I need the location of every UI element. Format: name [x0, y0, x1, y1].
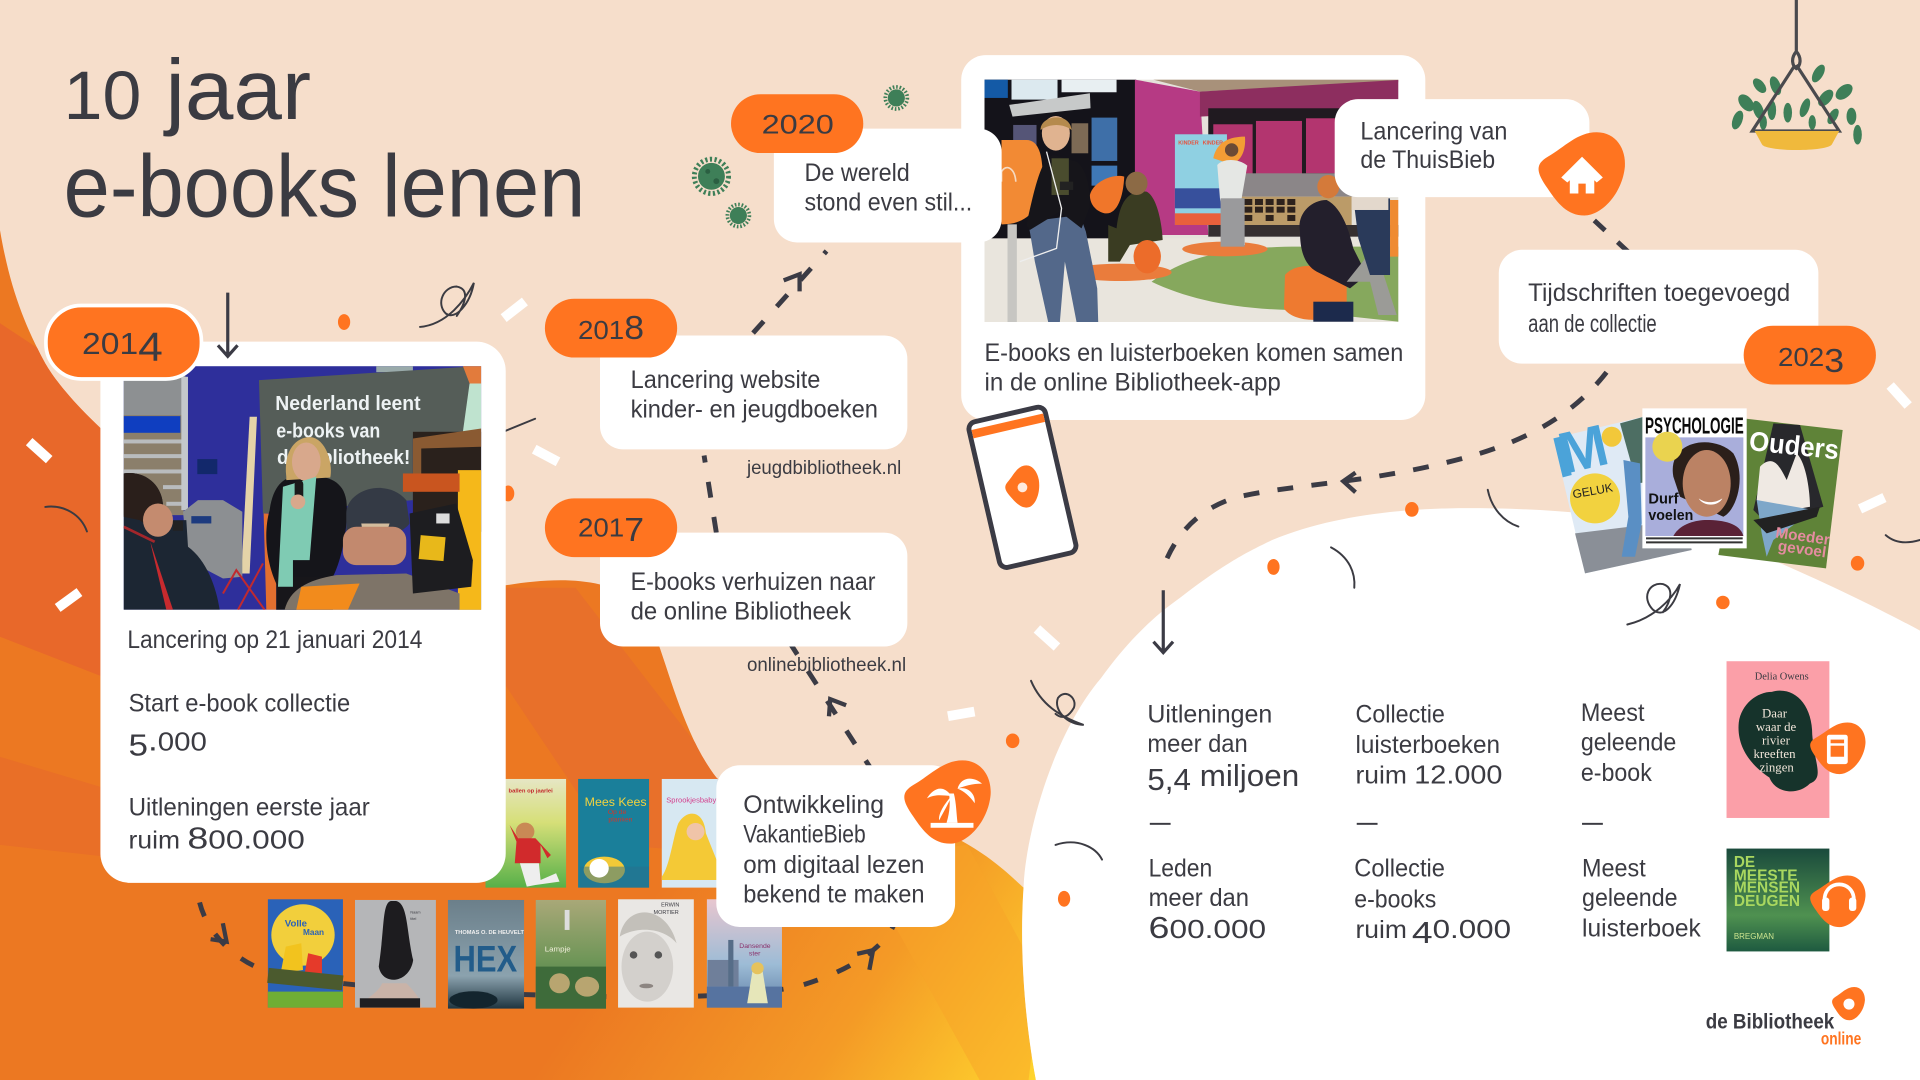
- number: 5.000: 000: [158, 729, 207, 757]
- panel: 2018 website: [545, 299, 907, 449]
- text: 2018: kinder- en jeugdboeken: [631, 396, 878, 424]
- book cover: Lampje: Lampje: [545, 944, 571, 953]
- book cover: Mees Kees: planken: [608, 816, 633, 823]
- badge: 2020: 2020: [762, 109, 834, 139]
- statistic: audiobook collection: Collectie: [1356, 700, 1445, 728]
- panel: magazines added: [1499, 250, 1876, 384]
- photo: launch event: [124, 366, 482, 610]
- text: app merge: in de online Bibliotheek-app: [984, 369, 1281, 397]
- statistic: most borrowed audiobook: [1582, 855, 1701, 943]
- white shape: [1022, 508, 1920, 1080]
- book cover: Lampje: [536, 900, 606, 1009]
- magazine: Margriet: M: [1552, 412, 1614, 487]
- book cover: HEX: HEX: [453, 939, 517, 980]
- book cover: black ponytail: titel: [410, 917, 416, 921]
- book cover: De meeste mensen deugen: [1727, 849, 1829, 951]
- statistic: most borrowed audiobook: geleende: [1582, 884, 1678, 912]
- statistic: most borrowed e-book: [1581, 699, 1676, 787]
- statistic: audiobook collection: ruim: [1356, 762, 1407, 790]
- panel: app: [961, 55, 1425, 420]
- statistic: e-book collection: 0.000: [1433, 916, 1511, 944]
- book cover: Mees Kees: Op de: [608, 809, 627, 816]
- statistic: members: [1149, 855, 1266, 945]
- statistic: e-book collection: e-books: [1354, 885, 1436, 913]
- book cover: De meeste mensen deugen: DE: [1734, 854, 1755, 871]
- number: 5.000: 5: [129, 729, 148, 763]
- magazine: Psychologie: voelen: [1648, 508, 1693, 524]
- book cover: Volle Maan: Volle: [285, 919, 307, 930]
- number: ruim 800.000: ruim: [129, 827, 180, 855]
- icon: virus top: [885, 87, 907, 109]
- dashed timeline path: [200, 220, 1629, 997]
- photo: launch event: de bibliotheek!: [277, 447, 410, 469]
- logo: de Bibliotheek online: [1706, 987, 1865, 1048]
- book cover: De meeste mensen deugen: DEUGEN: [1734, 893, 1800, 910]
- photo: library listening area: KINDER: [1178, 140, 1199, 146]
- title: [64, 42, 585, 236]
- text: 2017: [631, 568, 876, 626]
- statistic: loans: meer dan: [1147, 730, 1248, 758]
- panel: 2017 move: [545, 498, 907, 647]
- book cover: De meeste mensen deugen: MEESTE: [1734, 867, 1798, 884]
- book cover: De meeste mensen deugen: BREGMAN: [1734, 932, 1774, 941]
- text: start collection: Start e-book collectie: [129, 689, 350, 717]
- statistic: members: meer dan: [1149, 884, 1249, 912]
- books row: bottom: [267, 899, 782, 1009]
- text: magazines: [1528, 279, 1790, 338]
- text: ThuisBieb: [1360, 118, 1507, 174]
- book cover: Daar waar de rivierkreeften zingen: [1727, 661, 1829, 818]
- book cover: Sprookjesbaby: Sprookjesbaby: [666, 796, 717, 805]
- statistic: e-book collection: ruim: [1356, 916, 1407, 944]
- orange gradient shape: [0, 230, 1036, 1080]
- icon: hanging plant: [1730, 0, 1862, 150]
- book cover: HEX: THOMAS O. DE HEUVELT: [455, 930, 525, 936]
- photo: library listening area: [984, 80, 1398, 322]
- badge: 2017: 201: [578, 514, 624, 542]
- panel: ThuisBieb: [1335, 99, 1625, 216]
- badge: 2023: 3: [1824, 343, 1844, 380]
- books row: top: [485, 779, 718, 888]
- logo: de Bibliotheek online: de Bibliotheek: [1706, 1011, 1835, 1034]
- book cover: black ponytail: Naam: [410, 910, 421, 914]
- magazine: Psychologie: [1642, 408, 1747, 548]
- book cover: ballen op jaarlei: [485, 779, 566, 888]
- statistic: audiobook collection: luisterboeken: [1356, 731, 1500, 759]
- arrow: start 2014: [218, 293, 238, 356]
- icon: virus bottom: [727, 204, 749, 227]
- number: 5.000: .: [148, 724, 158, 758]
- photo: launch event: e-books van: [276, 420, 380, 442]
- badge: 2014: 4: [138, 324, 163, 370]
- arrow: to vakantiebieb: [857, 950, 873, 970]
- icon: headphones: [1810, 876, 1866, 927]
- text: 2020: stond even stil...: [804, 189, 972, 217]
- text: 2018: [631, 366, 878, 424]
- book cover: Dansende ster: ster: [749, 950, 761, 957]
- statistic: most borrowed audiobook: luisterboek: [1582, 915, 1701, 943]
- statistic: e-book collection: 4: [1412, 916, 1433, 950]
- badge: 2017: [545, 498, 677, 557]
- text: app merge: E-books en luisterboeken komen samen: [984, 339, 1403, 367]
- badge: 2018: 2018: [578, 310, 644, 347]
- panel: 2020 world stood still: [731, 94, 1002, 242]
- magazine: Psychologie: Durf: [1648, 491, 1679, 507]
- book cover: ballen op jaarlei: ballen op jaarlei: [509, 789, 553, 795]
- link: jeugdbibliotheek.nl: jeugdbibliotheek.nl: [746, 458, 901, 479]
- statistic: most borrowed e-book: e-book: [1581, 759, 1652, 787]
- title: e-books lenen: [64, 137, 585, 236]
- magazine: Ouders: gevoel: [1777, 538, 1827, 561]
- text: launch date: Lancering op 21 januari 2014: [127, 626, 422, 654]
- text: 2020: [804, 159, 972, 217]
- book cover: Daar waar de rivierkreeften zingen: Delia Owens: [1755, 672, 1809, 683]
- text: VakantieBieb: [743, 791, 924, 908]
- photo: launch event: Nederland leent: [275, 393, 421, 415]
- text: magazines: Tijdschriften toegevoegd: [1528, 279, 1790, 307]
- icon: virus large: [694, 159, 729, 193]
- statistic: most borrowed audiobook: Meest: [1582, 855, 1646, 883]
- phone illustration: [967, 406, 1077, 569]
- link: onlinebibliotheek.nl: onlinebibliotheek.nl: [747, 655, 906, 676]
- badge: 2017: 7: [624, 512, 644, 549]
- badge: 2018: [545, 299, 677, 358]
- book cover: black ponytail: [355, 900, 436, 1008]
- confetti decorations: [26, 283, 1920, 907]
- badge: 2023: 202: [1778, 344, 1824, 372]
- text: magazines: aan de collectie: [1528, 310, 1657, 338]
- magazine: Ouders: Moeder: [1774, 524, 1831, 549]
- badge: 2020: [731, 94, 863, 153]
- icon: bibliotheek logo: [1001, 463, 1044, 511]
- arrow: magazines to statistics: [1343, 473, 1356, 492]
- panel: 2014 launch: [100, 342, 506, 883]
- number: ruim 800.000: [129, 822, 305, 856]
- icon: e-book: [1810, 722, 1866, 774]
- statistic: most borrowed e-book: Meest: [1581, 699, 1645, 727]
- text: first year loans: Uitleningen eerste jaar: [129, 794, 370, 822]
- magazines: [1552, 408, 1843, 573]
- text: app merge: [984, 339, 1403, 397]
- book cover: Mijn tweede huid: MORTIER: [654, 910, 679, 916]
- arrow: to 2017: [829, 699, 846, 716]
- text: VakantieBieb: bekend te maken: [743, 880, 924, 908]
- icon: house: [1539, 132, 1625, 216]
- badge: 2023: [1744, 326, 1876, 384]
- book cover: Volle Maan: [267, 899, 343, 1008]
- book cover: Volle Maan: Maan: [303, 928, 324, 937]
- statistic: loans: miljoen: [1191, 759, 1299, 793]
- book cover: Daar waar de rivierkreeften zingen: Daar: [1762, 707, 1788, 721]
- text: 2017: E-books verhuizen naar: [631, 568, 876, 596]
- panel: VakantieBieb: [716, 760, 991, 927]
- badge: 2014: [46, 306, 201, 379]
- statistic: audiobook collection: 12.000: [1414, 762, 1502, 790]
- arrow: to 2020: [784, 274, 800, 291]
- book cover: Mijn tweede huid: ERWIN: [661, 903, 679, 909]
- logo: de Bibliotheek online: online: [1821, 1028, 1861, 1048]
- arrow: to book row: [211, 923, 227, 942]
- magazine: Margriet: GELUK: [1571, 480, 1614, 501]
- book cover: Sprookjesbaby: [662, 779, 718, 888]
- book cover: De meeste mensen deugen: MENSEN: [1734, 880, 1800, 897]
- text: 2017: de online Bibliotheek: [631, 598, 851, 626]
- book cover: Dansende ster: [707, 899, 782, 1008]
- badge: 2014: 201: [82, 327, 138, 361]
- magazine: Ouders: [1718, 418, 1843, 568]
- icon: palm tree: [904, 760, 991, 844]
- arrow: down to statistics: [1153, 590, 1173, 653]
- statistic: audiobook collection: [1356, 700, 1502, 790]
- book cover: Mees Kees: [578, 779, 649, 888]
- statistic: loans: 5,4: [1147, 763, 1191, 797]
- book cover: Daar waar de rivierkreeften zingen: waar de: [1756, 720, 1797, 734]
- statistic: loans: Uitleningen: [1147, 700, 1272, 728]
- statistic: e-book collection: [1354, 855, 1511, 950]
- text: 2018: Lancering website: [631, 366, 820, 394]
- book cover: HEX: [448, 900, 525, 1009]
- title: 10 jaar: [64, 42, 311, 138]
- book cover: Daar waar de rivierkreeften zingen: zingen: [1760, 760, 1794, 774]
- statistic: members: Leden: [1149, 855, 1212, 883]
- statistic: e-book collection: Collectie: [1354, 855, 1445, 883]
- statistic: members: 600.000: [1149, 911, 1266, 945]
- number: ruim 800.000: 800.000: [187, 822, 305, 856]
- book cover: Mijn tweede huid: [618, 899, 694, 1008]
- book cover: Daar waar de rivierkreeften zingen: rivier: [1762, 733, 1791, 747]
- magazine: Margriet: [1552, 412, 1692, 573]
- text: ThuisBieb: de ThuisBieb: [1360, 146, 1495, 174]
- magazine: Ouders: Ouders: [1748, 425, 1840, 465]
- book cover: Dansende ster: Dansende: [739, 943, 771, 950]
- magazine: Psychologie: PSYCHOLOGIE: [1645, 412, 1744, 438]
- statistic: loans: [1147, 700, 1299, 797]
- text: 2020: De wereld: [804, 159, 910, 187]
- book cover: Daar waar de rivierkreeften zingen: kreeften: [1753, 747, 1796, 761]
- photo: library listening area: KINDER: [1203, 140, 1223, 146]
- text: VakantieBieb: om digitaal lezen: [743, 851, 924, 879]
- text: VakantieBieb: Ontwikkeling: [743, 791, 884, 819]
- text: ThuisBieb: Lancering van: [1360, 118, 1507, 146]
- text: VakantieBieb: VakantieBieb: [743, 820, 866, 848]
- book cover: Mees Kees: Mees Kees: [585, 795, 647, 809]
- statistic: most borrowed e-book: geleende: [1581, 729, 1676, 757]
